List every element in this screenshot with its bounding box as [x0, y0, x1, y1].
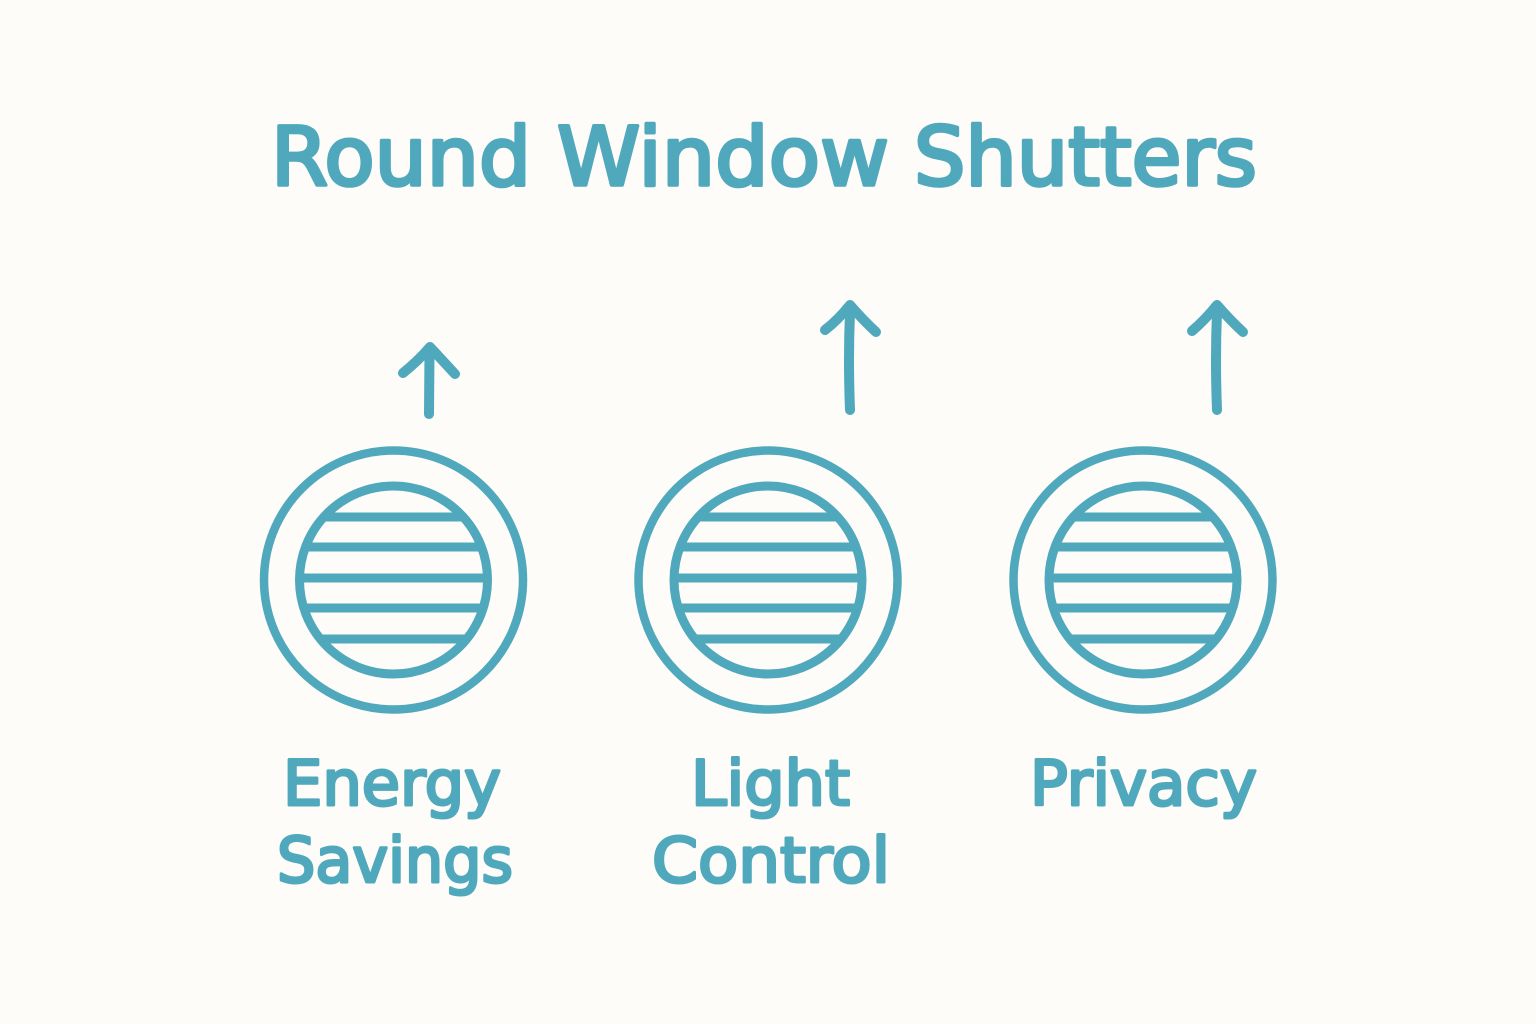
label: light control: [652, 747, 890, 897]
label: energy savings: Energy: [283, 747, 501, 820]
arrow: light control: [825, 305, 876, 410]
icon: shutter 1: [264, 450, 523, 710]
title: [271, 111, 1257, 205]
label: light control: Light: [691, 747, 850, 820]
label: energy savings: [277, 747, 513, 897]
title: Round: [271, 111, 531, 205]
arrow: energy savings: [403, 347, 455, 414]
label: energy savings: Savings: [277, 824, 513, 897]
title: Window: [557, 111, 889, 205]
icon: shutter 2: [638, 450, 898, 710]
label: light control: Control: [652, 824, 890, 897]
icon: shutter 3: [1014, 450, 1272, 710]
title: Shutters: [914, 111, 1257, 205]
arrow: privacy: [1192, 305, 1243, 410]
label: privacy: Privacy: [1030, 747, 1257, 820]
